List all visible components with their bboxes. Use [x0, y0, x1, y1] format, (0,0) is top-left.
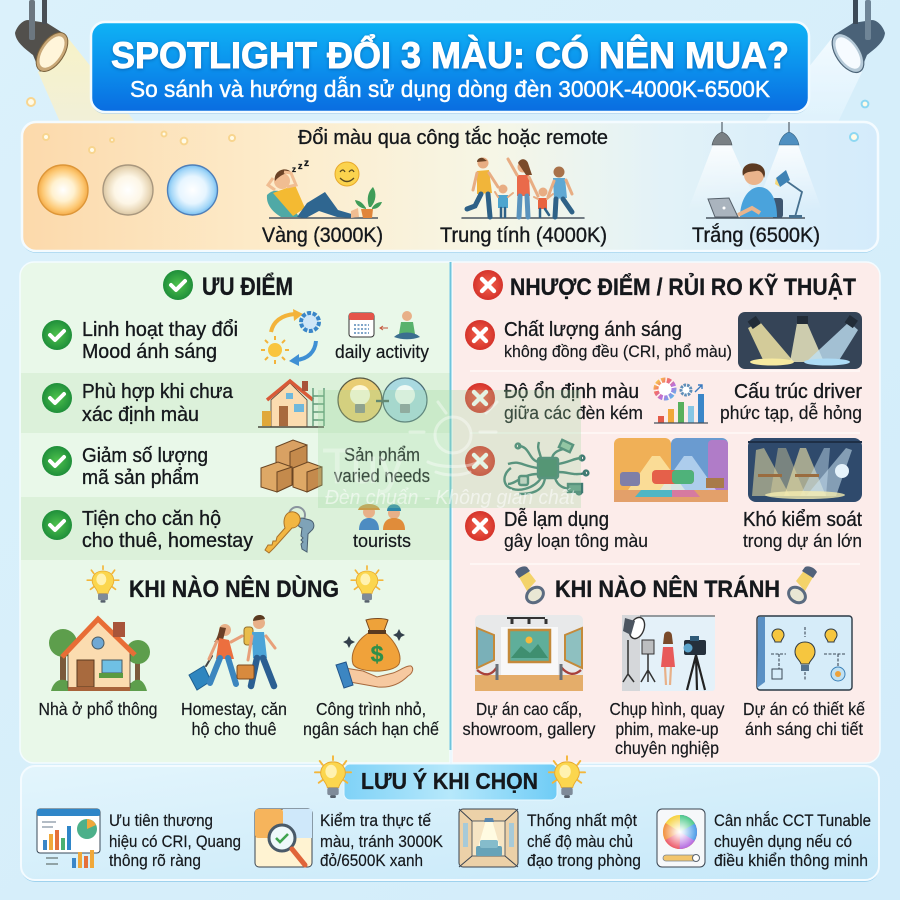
label [334, 445, 430, 486]
pro item 4: cho thuê, homestay [82, 529, 254, 552]
note 4 [657, 809, 871, 870]
panel: color modes [22, 98, 878, 253]
pro item 3 [42, 440, 430, 492]
use case: studio [610, 615, 725, 758]
panel: pros [20, 262, 450, 763]
icon: person working under lamps [688, 122, 822, 218]
text: thông rõ ràng [109, 852, 201, 870]
pro item 1: Linh hoạt thay đổi [82, 318, 238, 341]
image: mixed colour room [614, 438, 728, 502]
icon: money bag on hand: $ [371, 641, 384, 667]
text: Kiểm tra thực tế [320, 812, 431, 830]
subtitle: So sánh và hướng dẫn sử dụng dòng đèn 3000K-4000K-6500K [130, 76, 771, 102]
label: phim, make-up [616, 719, 718, 739]
lamp: neutral 4000K [103, 165, 153, 215]
icon: keys [265, 507, 314, 553]
lamp: warm 3000K [38, 165, 88, 215]
icon: house [49, 619, 150, 691]
use case: lighting design [743, 616, 865, 739]
icon: magnifier colour check [255, 809, 312, 867]
con item 1: Chất lượng ánh sáng [504, 318, 682, 341]
lamp: white 6500K [168, 165, 218, 215]
image: blueprint [757, 616, 852, 690]
text: chế độ màu chủ [527, 833, 633, 851]
icon: relaxing person: z [292, 165, 296, 174]
heading: when to use: KHI NÀO NÊN DÙNG [129, 575, 339, 603]
watermark: Đèn chuẩn - Không gian chất [325, 487, 576, 509]
text [527, 812, 641, 870]
text: Ưu tiên thương [109, 812, 213, 830]
label [462, 699, 596, 739]
text: Thống nhất một [527, 812, 637, 830]
image: studio [622, 615, 715, 691]
icon: gears and bars [654, 380, 708, 423]
text: Cân nhắc CCT Tunable [714, 811, 871, 830]
title banner [91, 22, 809, 114]
panel: cons [452, 262, 880, 763]
image: project spotlights [748, 438, 862, 502]
label [743, 699, 865, 739]
text [109, 812, 241, 870]
center divider [450, 262, 452, 750]
icon: calendar and person [349, 311, 420, 339]
label: Dự án có thiết kế [743, 699, 865, 719]
watermark: Tuy [322, 438, 404, 494]
label: ánh sáng chi tiết [745, 719, 863, 739]
label: daily activity [335, 342, 429, 362]
title: SPOTLIGHT ĐỔI 3 MÀU: CÓ NÊN MUA? [111, 33, 789, 76]
text: đỏ/6500K xanh [320, 852, 423, 870]
pro item 2: Phù hợp khi chưa [82, 380, 234, 403]
note 2 [255, 809, 443, 870]
icon: bulbs comparison [338, 378, 427, 422]
use case: house [38, 619, 158, 719]
label: hộ cho thuê [192, 719, 276, 739]
heading: pros [163, 270, 293, 301]
icon: travellers [189, 615, 275, 690]
label: Homestay, căn [181, 699, 287, 719]
pro item 1: Mood ánh sáng [82, 340, 217, 363]
row bands [21, 373, 450, 560]
heading: pros: ƯU ĐIỂM [202, 272, 293, 301]
label: Dự án cao cấp, [476, 699, 582, 719]
panel: notes [21, 756, 879, 882]
text: màu, tránh 3000K [320, 833, 443, 851]
con item 3: Dễ lạm dụng [504, 508, 609, 531]
heading: notes: LƯU Ý KHI CHỌN [361, 767, 538, 794]
con item 1 [465, 312, 862, 369]
heading: Đổi màu qua công tắc hoặc remote [298, 126, 608, 149]
con item 2: Độ ổn định màu [504, 380, 639, 403]
con item 3 [465, 438, 862, 551]
icon: relaxing person [267, 158, 382, 218]
label: chuyên nghiệp [615, 738, 719, 758]
icon: tourists [358, 504, 405, 530]
decorative light dots [27, 98, 868, 153]
image: three spotlights [738, 312, 862, 369]
text [714, 811, 871, 870]
pro item 4: Tiện cho căn hộ [82, 507, 221, 530]
text: điều khiển thông minh [714, 852, 868, 870]
con item 2: giữa các đèn kém [504, 403, 643, 423]
label: Sản phẩm [344, 445, 420, 465]
con item 2: Cấu trúc driver [734, 380, 862, 403]
spotlight beam right [765, 38, 862, 122]
heading: when to avoid [515, 566, 817, 606]
heading: notes [315, 756, 585, 800]
label: Chụp hình, quay [610, 699, 725, 719]
con item 3: gây loạn tông màu [504, 531, 648, 551]
pro item 4 [42, 504, 411, 553]
pro item 3: Giảm số lượng [82, 444, 208, 467]
con item 1: không đồng đều (CRI, phổ màu) [504, 342, 732, 361]
text [320, 812, 443, 870]
icon: spotlight right [826, 0, 885, 78]
label: white: Trắng (6500K) [692, 224, 820, 247]
icon: room [459, 809, 518, 867]
icon: house and ladder [258, 381, 324, 427]
icon: cycle [261, 309, 319, 366]
label: warm: Vàng (3000K) [262, 224, 383, 247]
label: showroom, gallery [462, 719, 596, 739]
icon: colour wheel [657, 809, 705, 867]
use case: gallery [462, 615, 596, 739]
text: chuyên dụng nếu có [714, 833, 852, 851]
note 1 [37, 809, 241, 870]
icon: circuit [504, 440, 588, 494]
use case: homestay [181, 615, 287, 739]
heading: cons: NHƯỢC ĐIỂM / RỦI RO KỸ THUẬT [510, 272, 856, 301]
note 3 [459, 809, 641, 870]
con item 2 [465, 380, 862, 423]
con item 3: Khó kiểm soát [743, 508, 862, 531]
con item 3: trong dự án lớn [743, 531, 862, 551]
label: neutral: Trung tính (4000K) [440, 224, 607, 247]
label: varied needs [334, 466, 430, 486]
image: gallery [475, 615, 583, 691]
icon: relaxing person: z [298, 161, 303, 171]
spotlight beam left [38, 38, 135, 122]
pro item 2 [42, 378, 427, 427]
icon: spotlight left [15, 0, 74, 77]
label [610, 699, 725, 758]
label [303, 699, 439, 739]
con item 2: phức tạp, dễ hỏng [720, 402, 862, 423]
icon: boxes [261, 440, 322, 492]
label: Nhà ở phổ thông [38, 699, 158, 719]
heading: when to avoid: KHI NÀO NÊN TRÁNH [555, 575, 780, 603]
icon: family [462, 158, 584, 218]
icon: dashboard [37, 809, 100, 868]
use case: small project [303, 618, 439, 739]
pro item 3: mã sản phẩm [82, 466, 199, 489]
pro item 2: xác định màu [82, 403, 199, 426]
label [181, 699, 287, 739]
watermark [318, 390, 581, 509]
label: Công trình nhỏ, [316, 699, 426, 719]
pro item 1 [42, 309, 429, 366]
label: tourists [353, 531, 411, 551]
text: hiệu có CRI, Quang [109, 833, 241, 851]
text: đạo trong phòng [527, 852, 641, 870]
icon: relaxing person: z [304, 158, 309, 169]
label: ngân sách hạn chế [303, 719, 439, 739]
heading: when to use [87, 566, 383, 603]
